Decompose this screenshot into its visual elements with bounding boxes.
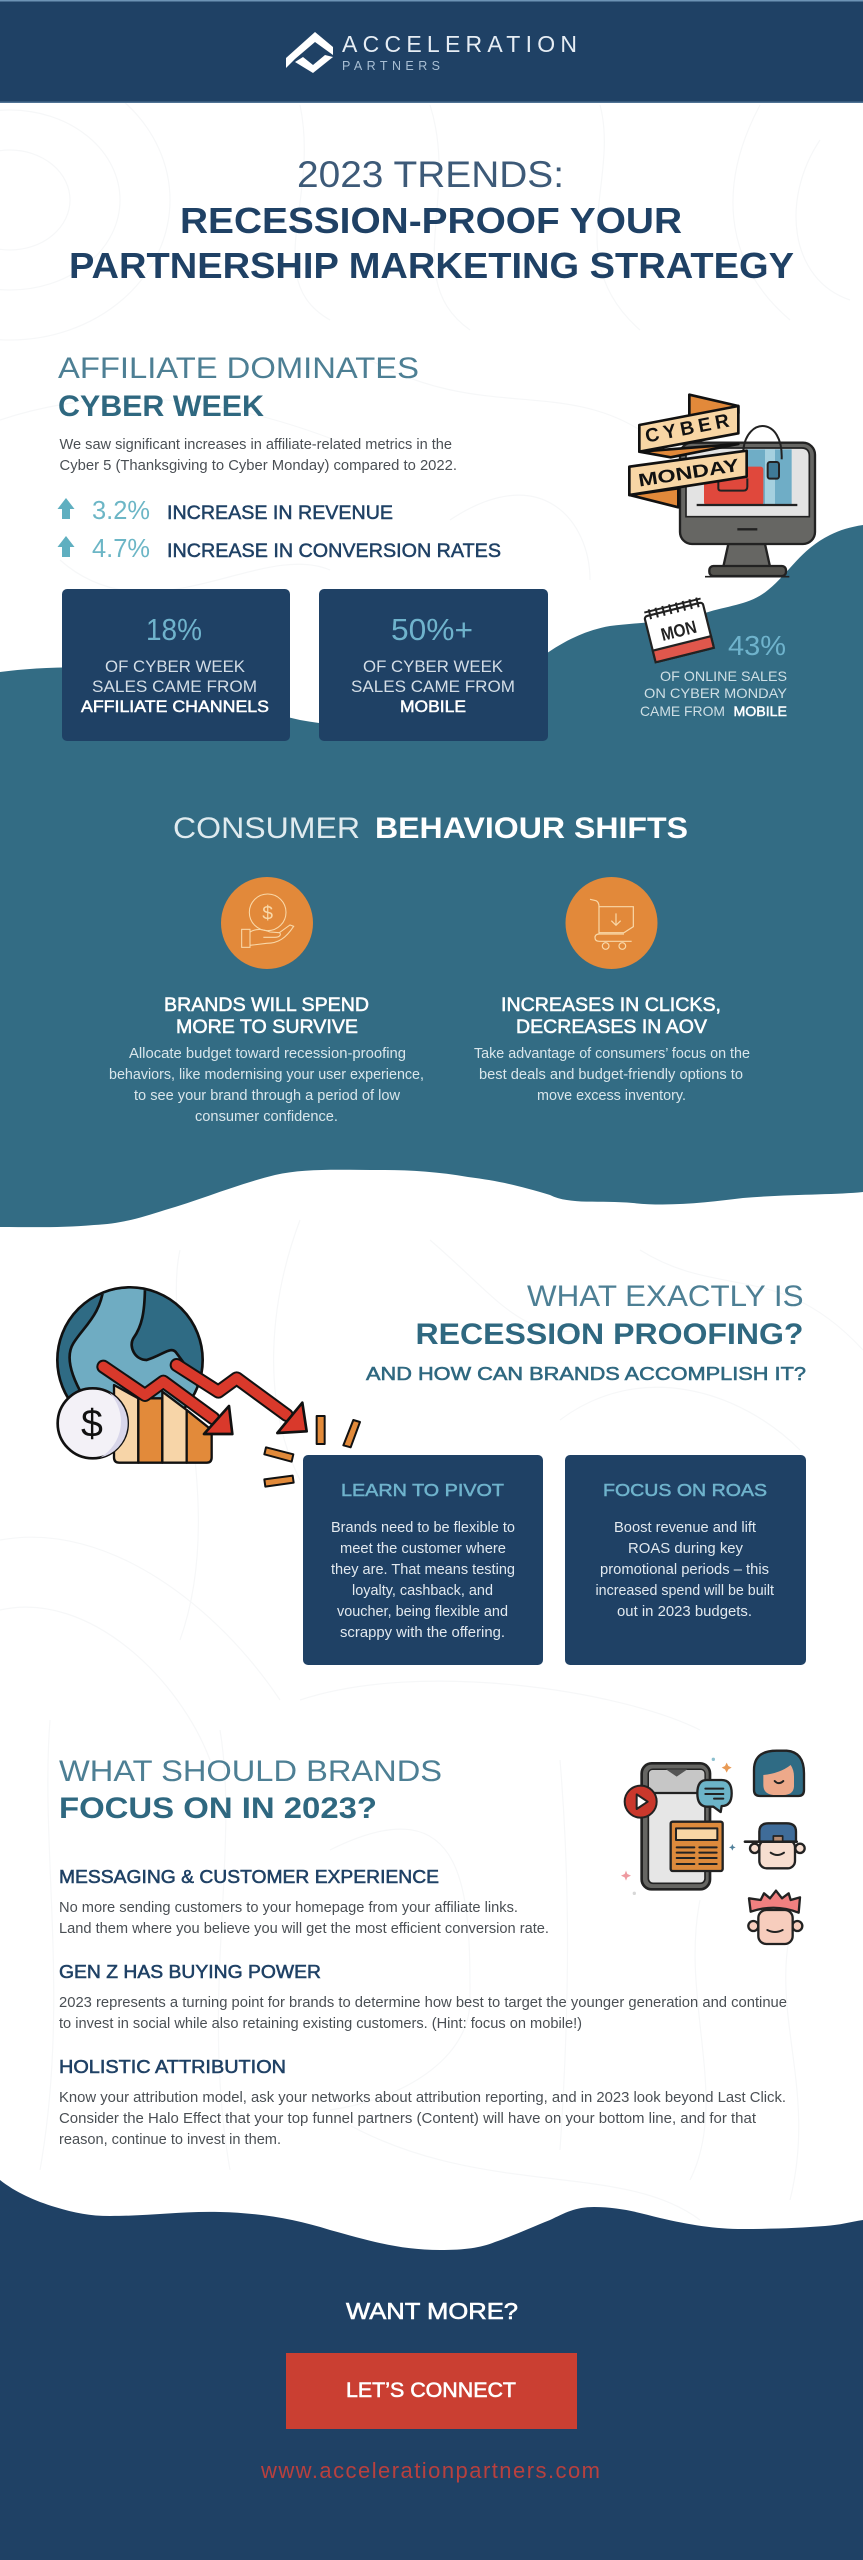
card: 18% affiliate channels: 18% [146, 612, 202, 647]
card: focus on roas: ROAS during key [628, 1540, 743, 1557]
article card [671, 1822, 723, 1871]
block: holistic attribution [59, 2056, 786, 2148]
icon: shopping cart [566, 877, 658, 969]
card: learn to pivot: loyalty, cashback, and [352, 1582, 493, 1599]
card: 18% affiliate channels: OF CYBER WEEK [105, 658, 245, 676]
icon: calendar [643, 596, 714, 662]
card: learn to pivot: Brands need to be flexible to [331, 1519, 515, 1536]
face: boy with cap [745, 1823, 805, 1868]
card: 50%+ mobile [319, 589, 548, 741]
column: increases in clicks: DECREASES IN AOV [516, 1016, 707, 1038]
icon: cyber monday monitor [629, 395, 815, 577]
icon: hand holding coin [221, 877, 313, 969]
heading: what should brands focus on [59, 1755, 442, 1825]
column: increases in clicks: Take advantage of consumers’ focus on the [474, 1045, 750, 1062]
logo: Acceleration Partners: PARTNERS [342, 59, 440, 73]
title: PARTNERSHIP MARKETING STRATEGY [69, 245, 794, 286]
stat: 43% online sales mobile: MOBILE [734, 703, 787, 719]
heading: affiliate dominates cyber week: CYBER WEEK [58, 390, 264, 423]
heading: what exactly is recession proofing: RECESSION PROOFING? [416, 1318, 804, 1351]
column: brands will spend: behaviors, like modernising your user experience, [109, 1066, 424, 1083]
block: holistic attribution: reason, continue to invest in them. [59, 2131, 281, 2148]
column: increases in clicks: move excess inventory. [537, 1087, 686, 1104]
column: increases in clicks [474, 877, 750, 1104]
block: gen z has buying power: to invest in social while also retaining existing customers. (Hint: focus on mobile!) [59, 2015, 582, 2032]
phone [642, 1763, 710, 1889]
card: 50%+ mobile: OF CYBER WEEK [363, 658, 503, 676]
card: learn to pivot: LEARN TO PIVOT [341, 1480, 504, 1500]
card: 50%+ mobile: MOBILE [400, 698, 466, 716]
heading: consumer behaviour shifts: CONSUMER [173, 812, 360, 845]
heading: consumer behaviour shifts [173, 812, 688, 845]
card: focus on roas: Boost revenue and lift [614, 1519, 757, 1536]
cyber ribbon [629, 395, 747, 507]
intro text [60, 436, 457, 474]
stat: revenue increase: INCREASE IN REVENUE [167, 502, 393, 524]
button: let's connect: LET’S CONNECT [346, 2379, 516, 2402]
stat: 43% online sales mobile: CAME FROM [640, 703, 725, 719]
falling arrows [103, 1365, 287, 1418]
stat: 43% online sales mobile [640, 630, 788, 719]
heading: what exactly is recession proofing [366, 1280, 806, 1384]
block: gen z has buying power [59, 1961, 787, 2032]
block: holistic attribution: HOLISTIC ATTRIBUTION [59, 2056, 286, 2077]
block: messaging and customer experience [59, 1866, 549, 1937]
sparkles [621, 1758, 736, 1895]
chat bubble [697, 1780, 732, 1812]
block: holistic attribution: Consider the Halo Effect that your top funnel partners (Content) will have on your bottom line, and for that [59, 2110, 757, 2127]
heading: affiliate dominates cyber week [58, 352, 419, 423]
card: learn to pivot: scrappy with the offering. [340, 1624, 505, 1641]
column: brands will spend: to see your brand through a period of low [134, 1087, 400, 1104]
teal wave panel [0, 525, 863, 1227]
play button [625, 1786, 657, 1818]
card: learn to pivot: meet the customer where [340, 1540, 506, 1557]
icon: up arrow [58, 536, 74, 557]
heading: what exactly is recession proofing: WHAT EXACTLY IS [527, 1280, 804, 1313]
button: let's connect [286, 2353, 577, 2429]
heading: what should brands focus on: FOCUS ON IN 2023? [59, 1792, 377, 1825]
card: focus on roas: out in 2023 budgets. [617, 1603, 752, 1620]
title: 2023 TRENDS: [297, 154, 564, 195]
block: messaging and customer experience: Land them where you believe you will get the most efficient conversion rate. [59, 1920, 549, 1937]
icon: calendar: MON [659, 617, 699, 645]
face: spiky hair [748, 1891, 802, 1944]
bars [114, 1385, 212, 1463]
heading: consumer behaviour shifts: BEHAVIOUR SHIFTS [375, 812, 688, 845]
icon: globe with falling chart [57, 1283, 360, 1487]
logo: Acceleration Partners: ACCELERATION [342, 31, 577, 57]
column: brands will spend: MORE TO SURVIVE [176, 1016, 358, 1038]
card: learn to pivot: voucher, being flexible and [337, 1603, 508, 1620]
column: brands will spend: BRANDS WILL SPEND [164, 994, 369, 1016]
card: learn to pivot [303, 1455, 543, 1665]
footer wave panel [0, 2180, 863, 2560]
column: brands will spend: consumer confidence. [195, 1108, 338, 1125]
column: brands will spend [109, 877, 424, 1125]
heading: what exactly is recession proofing: AND HOW CAN BRANDS ACCOMPLISH IT? [366, 1364, 806, 1384]
header bar [0, 0, 863, 103]
stat: conversion rate increase: INCREASE IN CONVERSION RATES [167, 540, 501, 562]
icon: hand holding coin: $ [262, 903, 273, 924]
column: brands will spend: Allocate budget toward recession-proofing [129, 1045, 406, 1062]
title: RECESSION-PROOF YOUR [180, 200, 682, 241]
logo: Acceleration Partners [286, 31, 577, 73]
block: gen z has buying power: GEN Z HAS BUYING POWER [59, 1961, 321, 1982]
title [69, 154, 794, 286]
stat: revenue increase [58, 495, 393, 525]
heading: affiliate dominates cyber week: AFFILIATE DOMINATES [58, 352, 419, 385]
heading: what should brands focus on: WHAT SHOULD BRANDS [59, 1755, 442, 1788]
dollar coin [58, 1388, 128, 1458]
card: 50%+ mobile: 50%+ [391, 612, 473, 647]
card: 18% affiliate channels [62, 589, 290, 741]
block: gen z has buying power: 2023 represents a turning point for brands to determine how best to target the younger generation and continue [59, 1994, 787, 2011]
intro text: We saw significant increases in affiliate-related metrics in the [60, 436, 452, 453]
card: 18% affiliate channels: SALES CAME FROM [92, 678, 257, 696]
stat: conversion rate increase [58, 533, 501, 563]
dollar coin: $ [81, 1402, 103, 1446]
block: messaging and customer experience: MESSAGING & CUSTOMER EXPERIENCE [59, 1866, 439, 1887]
block: messaging and customer experience: No more sending customers to your homepage from your affiliate links. [59, 1899, 518, 1916]
stat: 43% online sales mobile: OF ONLINE SALES [660, 668, 787, 684]
column: increases in clicks: best deals and budget-friendly options to [479, 1066, 743, 1083]
monitor body [680, 443, 815, 544]
icon: phone and faces [621, 1751, 805, 1944]
card: 18% affiliate channels: AFFILIATE CHANNELS [81, 698, 269, 716]
stat: conversion rate increase: 4.7% [92, 533, 150, 563]
globe [56, 1286, 204, 1408]
card: focus on roas [565, 1455, 806, 1665]
face: woman [754, 1751, 804, 1796]
heading: want more: WANT MORE? [346, 2298, 518, 2324]
card: focus on roas: FOCUS ON ROAS [603, 1480, 767, 1500]
card: focus on roas: increased spend will be built [596, 1582, 775, 1599]
icon: cyber monday monitor: CYBER [644, 411, 731, 448]
card: focus on roas: promotional periods – this [600, 1561, 769, 1578]
footer url: www.accelerationpartners.com [260, 2458, 600, 2483]
icon: up arrow [58, 498, 74, 519]
stat: 43% online sales mobile: 43% [728, 630, 786, 661]
monitor stand [709, 544, 786, 576]
card: 50%+ mobile: SALES CAME FROM [351, 678, 515, 696]
intro text: Cyber 5 (Thanksgiving to Cyber Monday) compared to 2022. [60, 457, 457, 474]
icon: cyber monday monitor: MONDAY [637, 455, 740, 491]
stat: 43% online sales mobile: ON CYBER MONDAY [644, 685, 788, 701]
impact dashes [264, 1416, 360, 1487]
card: learn to pivot: they are. That means testing [331, 1561, 515, 1578]
column: increases in clicks: INCREASES IN CLICKS, [501, 994, 721, 1016]
block: holistic attribution: Know your attribution model, ask your networks about attribution reporting, and in 2023 look beyond Last Click. [59, 2089, 786, 2106]
stat: revenue increase: 3.2% [92, 495, 150, 525]
